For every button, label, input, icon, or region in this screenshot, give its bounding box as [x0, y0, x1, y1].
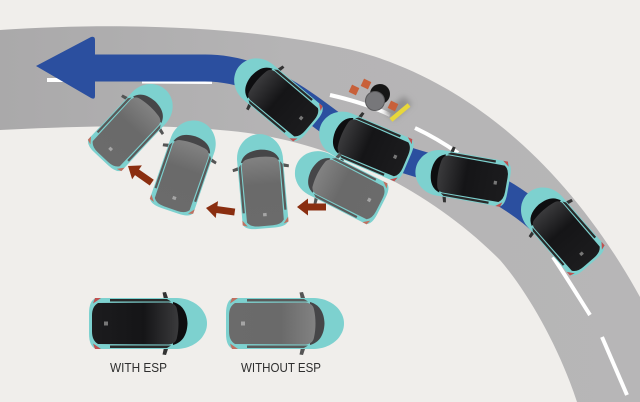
car without ESP, position 3 — [143, 112, 227, 220]
legend label: with ESP: WITH ESP — [110, 361, 167, 375]
barrier shadow — [384, 96, 412, 120]
brown arrow 1 — [297, 198, 326, 216]
car without ESP, position 1 — [284, 138, 394, 231]
obstacle: manhole cone and debris — [349, 79, 412, 120]
legend: car with ESP — [89, 292, 207, 355]
car without ESP, position 4 — [81, 71, 186, 178]
cone base — [366, 92, 384, 110]
car with ESP, position 3 — [411, 141, 514, 213]
hole — [370, 84, 390, 104]
legend label: without ESP: WITHOUT ESP — [241, 361, 321, 375]
car without ESP, position 2 — [230, 132, 294, 231]
yellow barrier — [391, 105, 409, 120]
legend: car without ESP — [226, 292, 344, 355]
brown arrow 3 — [123, 159, 157, 190]
car with ESP, position 2 — [310, 99, 419, 188]
road centre line dashes — [47, 80, 627, 395]
blue path arrow: ESP corrected trajectory — [36, 37, 545, 225]
car with ESP, position 4 — [507, 174, 612, 283]
car with ESP, position 1 — [221, 44, 330, 149]
debris blocks — [349, 79, 398, 111]
brown arrow 2 — [205, 200, 236, 220]
